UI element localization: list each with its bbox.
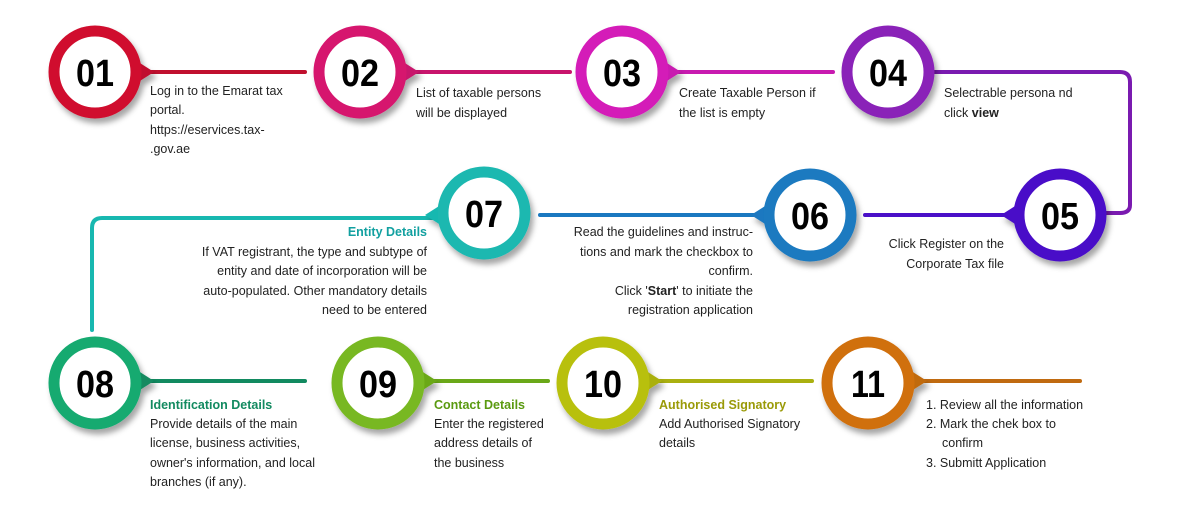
text 04: Selectrable persona nd — [944, 86, 1073, 100]
text 10: Authorised Signatory — [659, 398, 786, 412]
text 06: registration application — [628, 303, 753, 317]
step 03 circle — [581, 31, 681, 113]
step 07 circle — [425, 172, 525, 254]
text 11: 2. Mark the chek box to — [926, 417, 1056, 431]
step 06 circle — [751, 174, 851, 256]
text 04 — [944, 86, 1073, 120]
text 07: need to be entered — [322, 303, 427, 317]
step 10 circle — [562, 342, 662, 424]
text 05 — [889, 237, 1004, 271]
step 02 circle — [319, 31, 419, 113]
text 08: license, business activities, — [150, 436, 300, 450]
text 09: the business — [434, 456, 504, 470]
text 01: .gov.ae — [150, 142, 190, 156]
text 11: 3. Submitt Application — [926, 456, 1046, 470]
text 02: List of taxable persons — [416, 86, 541, 100]
step 05 circle: 05 — [1041, 196, 1079, 238]
text 07: auto-populated. Other mandatory details — [203, 284, 427, 298]
text 08: Identification Details — [150, 398, 272, 412]
step 01 circle: 01 — [76, 53, 114, 95]
step 01 circle — [54, 31, 154, 113]
step 09 circle — [337, 342, 437, 424]
step 07 circle: 07 — [465, 194, 503, 236]
text 06: Read the guidelines and instruc- — [574, 225, 753, 239]
connector lines — [92, 72, 1130, 381]
text 09: Contact Details — [434, 398, 525, 412]
text 06: tions and mark the checkbox to — [580, 245, 753, 259]
step 11 circle: 11 — [851, 364, 885, 406]
text 09: Enter the registered — [434, 417, 544, 431]
step 08 circle: 08 — [76, 364, 114, 406]
text 08 — [150, 398, 315, 489]
step 10 circle: 10 — [584, 364, 622, 406]
text 08: branches (if any). — [150, 475, 247, 489]
text 09: address details of — [434, 436, 533, 450]
step 03 circle: 03 — [603, 53, 641, 95]
text 08: Provide details of the main — [150, 417, 297, 431]
text 03: Create Taxable Person if — [679, 86, 816, 100]
text 09 — [434, 398, 544, 470]
text 01: Log in to the Emarat tax — [150, 84, 283, 98]
text 07: If VAT registrant, the type and subtype of — [202, 245, 428, 259]
step 06 circle: 06 — [791, 196, 829, 238]
step 11 circle — [827, 342, 927, 424]
step 05 circle — [1001, 174, 1101, 256]
text 08: owner's information, and local — [150, 456, 315, 470]
text 01: https://eservices.tax- — [150, 123, 265, 137]
text 10: details — [659, 436, 695, 450]
text 11: 1. Review all the information — [926, 398, 1083, 412]
text 02: will be displayed — [415, 106, 507, 120]
text 07: entity and date of incorporation will be — [217, 264, 427, 278]
step 08 circle — [54, 342, 154, 424]
step 09 circle: 09 — [359, 364, 397, 406]
step 02 circle: 02 — [341, 53, 379, 95]
text 03: the list is empty — [679, 106, 766, 120]
text 10: Add Authorised Signatory — [659, 417, 801, 431]
text 07: Entity Details — [348, 225, 427, 239]
text 01 — [150, 84, 283, 156]
text 06: Click 'Start' to initiate the — [615, 284, 753, 298]
text 11: confirm — [942, 436, 983, 450]
text 05: Corporate Tax file — [906, 257, 1004, 271]
text 02 — [415, 86, 541, 120]
text 11 — [926, 398, 1083, 470]
text 03 — [679, 86, 816, 120]
text 01: portal. — [150, 103, 185, 117]
step 04 circle: 04 — [869, 53, 907, 95]
text 05: Click Register on the — [889, 237, 1004, 251]
text 10 — [659, 398, 801, 450]
text 06: confirm. — [709, 264, 753, 278]
text 06 — [574, 225, 753, 317]
text 04: click view — [944, 106, 999, 120]
step 04 circle — [847, 31, 929, 113]
text 07 — [202, 225, 428, 317]
